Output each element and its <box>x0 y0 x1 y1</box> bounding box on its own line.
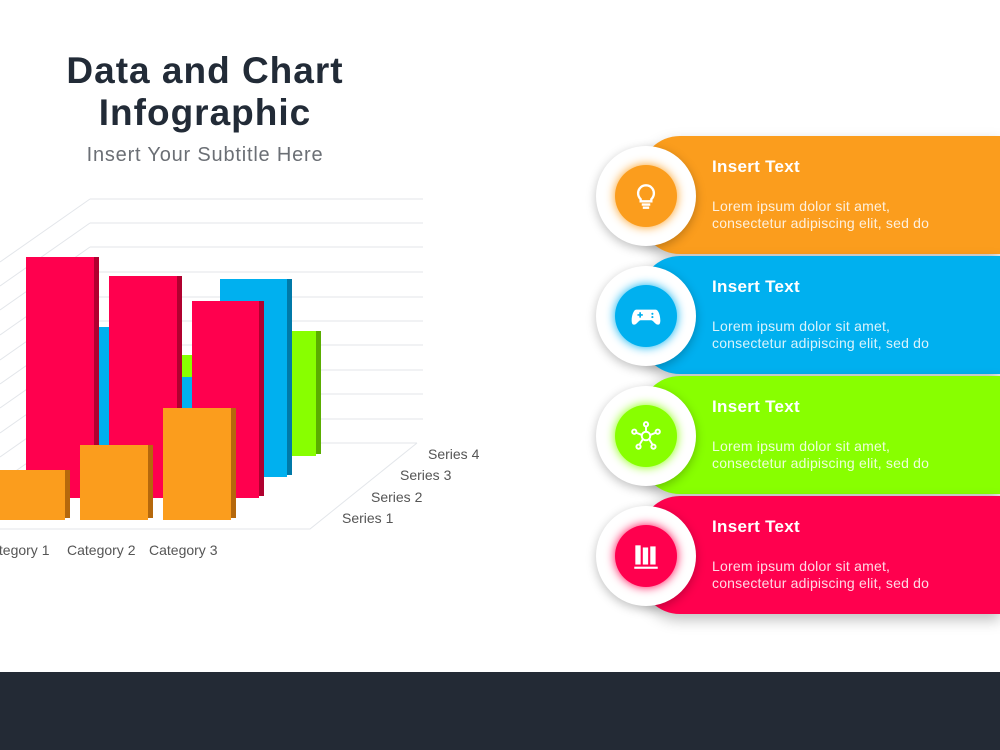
subtitle: Insert Your Subtitle Here <box>87 144 323 166</box>
blue series <box>98 279 292 477</box>
card 1 orange: Insert Text <box>712 157 800 176</box>
card 3 green: consectetur adipiscing elit, sed do <box>712 455 929 471</box>
green series <box>181 331 321 456</box>
axis labels: Category 3 <box>149 542 218 558</box>
icon: lightbulb <box>596 146 696 246</box>
axis labels: Series 3 <box>400 467 452 483</box>
axis labels <box>0 446 480 558</box>
card 3 green <box>640 376 1000 494</box>
card 1 orange: consectetur adipiscing elit, sed do <box>712 215 929 231</box>
card 3 green: Insert Text <box>712 397 800 416</box>
title: Data and Chart <box>66 50 344 91</box>
card 4 pink: Lorem ipsum dolor sit amet, <box>712 558 890 574</box>
card 2 blue: consectetur adipiscing elit, sed do <box>712 335 929 351</box>
card 4 pink: consectetur adipiscing elit, sed do <box>712 575 929 591</box>
card 1 orange <box>640 136 1000 254</box>
3d bar chart <box>0 198 480 558</box>
card 4 pink <box>640 496 1000 614</box>
title <box>66 50 344 133</box>
title: Infographic <box>99 92 311 133</box>
icon: books <box>596 506 696 606</box>
card 4 pink: Insert Text <box>712 517 800 536</box>
icon: gamepad <box>596 266 696 366</box>
orange series <box>0 408 236 520</box>
card 3 green: Lorem ipsum dolor sit amet, <box>712 438 890 454</box>
card 2 blue: Lorem ipsum dolor sit amet, <box>712 318 890 334</box>
icon: network <box>596 386 696 486</box>
axis labels: Category 2 <box>67 542 136 558</box>
card 2 blue <box>640 256 1000 374</box>
footer bar <box>0 672 1000 750</box>
card 2 blue: Insert Text <box>712 277 800 296</box>
card 1 orange: Lorem ipsum dolor sit amet, <box>712 198 890 214</box>
axis labels: Series 2 <box>371 489 423 505</box>
red series <box>26 257 259 498</box>
axis labels: Series 4 <box>428 446 480 462</box>
axis labels: Series 1 <box>342 510 394 526</box>
